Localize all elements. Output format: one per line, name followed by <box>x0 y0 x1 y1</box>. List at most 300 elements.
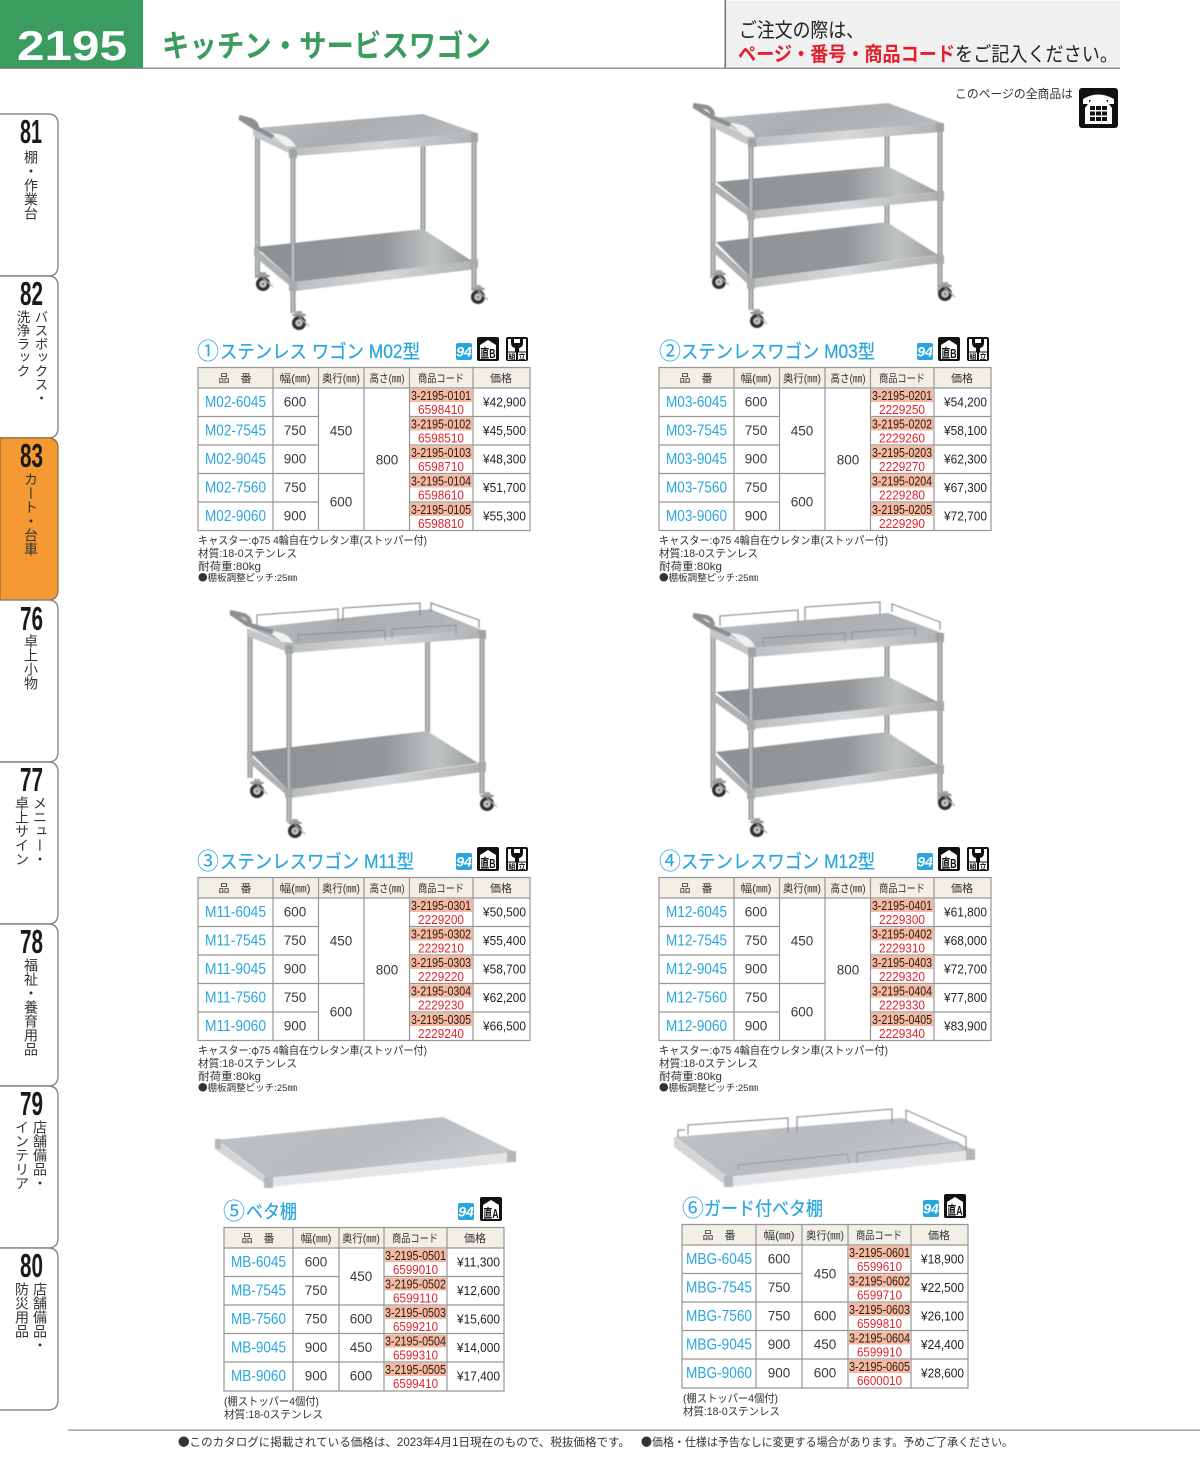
table: product 6: 6599910 <box>857 1346 902 1360</box>
table: product 1: 600 <box>330 494 352 510</box>
table: product 2: M03-6045 <box>666 394 727 411</box>
heading: product 1: ① <box>197 338 219 364</box>
badges: product 2: 組 <box>970 352 976 361</box>
table: product 1: 800 <box>376 452 398 468</box>
table: product 3: 3-2195-0302 <box>411 926 471 942</box>
heading: product 2: ② <box>659 338 681 364</box>
icon: telephone <box>1079 88 1118 128</box>
table: product 6: 3-2195-0605 <box>849 1359 910 1374</box>
table: product 3: 2229240 <box>418 1027 464 1041</box>
badges: product 2: 直B <box>942 346 956 361</box>
table: product 3: ¥58,700 <box>482 962 526 976</box>
badges: product 1: 組 <box>508 352 516 361</box>
table: product 2: M03-7545 <box>666 422 727 440</box>
table: product 1: ¥55,300 <box>482 508 526 524</box>
table: product 2: ¥62,300 <box>943 452 987 466</box>
table: product 4: 商品コード <box>879 882 925 895</box>
product image: flat shelf <box>215 1117 516 1188</box>
table: product 5: MB-9060 <box>231 1368 286 1385</box>
table: product 6: MBG-9060 <box>686 1365 752 1382</box>
sidebar tab 78 <box>0 923 58 1086</box>
table: product 1: 3-2195-0102 <box>411 416 471 432</box>
table: product 3: 奥行(㎜) <box>322 881 360 895</box>
table: product 5: 750 <box>305 1312 327 1326</box>
table: product 4: 600 <box>791 1004 813 1020</box>
table: product 1: M02-9045 <box>205 451 266 468</box>
table: product 4: 2229340 <box>879 1027 925 1041</box>
product image: cart M11 <box>230 603 497 838</box>
table: product 3: 600 <box>284 904 306 920</box>
table: product 6: 幅(㎜) <box>764 1229 794 1242</box>
table: product 4: ¥72,700 <box>943 962 987 976</box>
table: product 1: M02-7560 <box>205 480 266 496</box>
table: product 4: 750 <box>745 933 767 948</box>
product image: cart M12 <box>693 602 955 837</box>
table: product 3: M11-7545 <box>205 932 266 950</box>
table: product 6: 900 <box>768 1337 790 1352</box>
notes: product 4: 耐荷重:80kg <box>659 1069 722 1083</box>
table: product 6: 価格 <box>928 1228 950 1242</box>
table: product 6: 品 番 <box>702 1229 736 1242</box>
table: product 1: 奥行(㎜) <box>322 371 360 385</box>
table: product 4: M12-9045 <box>666 961 727 978</box>
notes: product 4: 材質:18-0ステンレス <box>659 1056 758 1070</box>
notes: product 1: 材質:18-0ステンレス <box>198 546 297 560</box>
table: product 5: 6599310 <box>393 1348 438 1362</box>
table: product 4: 2229300 <box>879 913 925 927</box>
table: product 1: 3-2195-0104 <box>411 474 471 488</box>
table: product 3: 2229230 <box>418 998 464 1012</box>
table: product 4: 800 <box>837 962 859 978</box>
table: product 4: ¥77,800 <box>943 990 987 1005</box>
table: product 1: 3-2195-0105 <box>411 502 471 517</box>
table: product 3: 3-2195-0303 <box>411 955 471 970</box>
table: product 4: M12-9060 <box>666 1018 727 1035</box>
table: product 1: M02-7545 <box>205 422 266 440</box>
table: product 3: M11-9060 <box>205 1018 266 1035</box>
badges: product 5 <box>458 1197 502 1221</box>
table: product 2: 2229270 <box>879 460 925 474</box>
table: product 3: 900 <box>284 1018 306 1034</box>
notes: product 3: キャスター:φ75 4輪自在ウレタン車(ストッパー付) <box>198 1042 427 1058</box>
heading: product 3: ③ <box>197 848 219 874</box>
footer note: ●価格・仕様は予告なしに変更する場合があります。予めご了承ください。 <box>641 1434 1013 1450</box>
badges: product 2: 立 <box>980 352 986 361</box>
footer note <box>178 1434 1013 1450</box>
notes: product 5: 材質:18-0ステンレス <box>224 1407 323 1421</box>
table: product 4: ¥68,000 <box>943 933 987 948</box>
badges: product 1 <box>456 337 528 361</box>
table: product 2: 2229250 <box>879 403 925 417</box>
table: product 6: 600 <box>814 1308 836 1324</box>
table: product 6: 3-2195-0601 <box>849 1245 910 1260</box>
sidebar tab 78: 福祉・養育用品 <box>23 958 39 1056</box>
table: product 5: MB-7545 <box>231 1282 286 1300</box>
notes: product 2: 材質:18-0ステンレス <box>659 546 758 560</box>
table: product 3: ¥66,500 <box>482 1018 526 1034</box>
table: product 2: ¥54,200 <box>943 394 987 410</box>
sidebar tab 80: 80 <box>20 1247 43 1284</box>
table: product 2: 750 <box>745 423 767 438</box>
table: product 1: 6598610 <box>418 488 464 502</box>
sidebar tab 83 active <box>0 437 58 600</box>
table: product 6: ¥22,500 <box>920 1280 964 1295</box>
table: product 4: 高さ(㎜) <box>830 881 866 895</box>
table: product 3: 900 <box>284 962 306 976</box>
badges: product 1: 直B <box>480 346 496 361</box>
table: product 2: 3-2195-0204 <box>872 474 932 488</box>
table: product 5: 3-2195-0504 <box>385 1334 446 1348</box>
table: product 3: M11-7560 <box>205 990 266 1006</box>
sidebar tab 76 <box>0 600 58 762</box>
sidebar tab 79: 店舗備品・ <box>32 1120 48 1190</box>
table: product 1: ¥42,900 <box>482 394 526 410</box>
heading: product 2: ステンレスワゴン M03型 <box>681 341 875 363</box>
table: product 5: 600 <box>305 1254 327 1270</box>
badges: product 3: 立 <box>518 862 526 871</box>
table: product 4: ¥83,900 <box>943 1018 987 1034</box>
notes: product 4: キャスター:φ75 4輪自在ウレタン車(ストッパー付) <box>659 1042 888 1058</box>
sidebar tab 79 <box>0 1085 58 1248</box>
table: product 1: 600 <box>284 394 306 410</box>
notes: product 6: 材質:18-0ステンレス <box>683 1404 780 1418</box>
table: product 6: 750 <box>768 1280 790 1295</box>
table: product 2: 3-2195-0201 <box>872 388 932 403</box>
table: product 3: ¥50,500 <box>482 904 526 920</box>
notes: product 5 <box>224 1394 323 1421</box>
table: product 4: 600 <box>745 904 767 920</box>
table: product 4: 450 <box>791 934 813 948</box>
table: product 2: 900 <box>745 452 767 466</box>
table: product 4: 3-2195-0403 <box>872 955 932 970</box>
table: product 2: 2229280 <box>879 488 925 502</box>
sidebar tab 77: 77 <box>20 761 43 798</box>
badges: product 1: 立 <box>518 352 526 361</box>
table: product 1: 450 <box>330 424 352 438</box>
heading: product 2 <box>659 338 875 364</box>
heading: product 1 <box>197 338 420 364</box>
table: product 1: 6598810 <box>418 517 464 531</box>
table: product 6: ¥24,400 <box>920 1337 964 1352</box>
badges: product 6: 直A <box>948 1203 963 1218</box>
table: product 4: 品 番 <box>680 882 712 895</box>
table: product 5: MB-7560 <box>231 1311 286 1328</box>
table: product 6: ¥28,600 <box>920 1366 964 1380</box>
table: product 6: 600 <box>768 1252 790 1266</box>
table: product 1: 6598510 <box>418 432 464 446</box>
table: product 6: 3-2195-0602 <box>849 1274 910 1288</box>
heading: product 1: ステンレス ワゴン M02型 <box>220 341 420 363</box>
table: product 1: 3-2195-0103 <box>411 445 471 460</box>
table: product 6: 600 <box>814 1366 836 1380</box>
table: product 2: 高さ(㎜) <box>830 371 866 385</box>
table: product 1: 3-2195-0101 <box>411 388 471 403</box>
sidebar tab 79: インテリア <box>14 1120 30 1190</box>
table: product 3: 2229220 <box>418 970 464 984</box>
footer note: ●このカタログに掲載されている価格は、2023年4月1日現在のもので、税抜価格です。 <box>178 1434 630 1450</box>
table: product 4: M12-6045 <box>666 904 727 921</box>
table: product 3: 2229200 <box>418 913 464 927</box>
badges: product 4 <box>917 847 989 871</box>
table: product 2: 750 <box>745 480 767 495</box>
table: product 4 <box>659 878 991 1041</box>
page number tab <box>0 0 143 69</box>
table: product 2: 2229260 <box>879 432 925 446</box>
sidebar tab 81 <box>0 113 58 276</box>
table: product 1: 750 <box>284 480 306 495</box>
table: product 1: ¥51,700 <box>482 480 526 495</box>
heading: product 3: ステンレスワゴン M11型 <box>220 851 414 873</box>
notes: product 6: (棚ストッパー4個付) <box>683 1391 778 1405</box>
table: product 3: ¥62,200 <box>482 990 526 1005</box>
table: product 1: 高さ(㎜) <box>370 371 404 385</box>
sidebar tab 82: バスボックス・ <box>32 310 48 404</box>
table: product 5: 900 <box>305 1340 327 1355</box>
sidebar tab 76: 卓上小物 <box>23 634 39 691</box>
phone note: このページの全商品は <box>955 87 1073 101</box>
table: product 3: 商品コード <box>418 882 464 895</box>
heading: product 4: ステンレスワゴン M12型 <box>681 851 875 873</box>
table: product 4: M12-7560 <box>666 990 727 1006</box>
table: product 6: 750 <box>768 1308 790 1324</box>
table: product 2: 600 <box>745 394 767 410</box>
table: product 5: 3-2195-0503 <box>385 1305 446 1320</box>
table: product 6: ¥18,900 <box>920 1252 964 1266</box>
table: product 5: MB-9045 <box>231 1340 286 1356</box>
table: product 1: M02-6045 <box>205 394 266 411</box>
table: product 6: 450 <box>814 1337 836 1352</box>
table: product 1: 750 <box>284 423 306 438</box>
table: product 3: 600 <box>330 1004 352 1020</box>
table: product 4: 3-2195-0402 <box>872 926 932 942</box>
table: product 3: 高さ(㎜) <box>370 881 404 895</box>
product image: guarded flat shelf <box>674 1109 975 1187</box>
table: product 6: 商品コード <box>856 1229 902 1242</box>
sidebar tab 76: 76 <box>20 600 43 637</box>
sidebar tab 82: 82 <box>20 275 43 312</box>
table: product 6: 6599810 <box>857 1317 902 1331</box>
sidebar tab 83 active: 83 <box>20 437 43 474</box>
table: product 2: 600 <box>791 494 813 510</box>
table: product 6: MBG-7560 <box>686 1308 752 1325</box>
table: product 4: ¥61,800 <box>943 904 987 920</box>
table: product 2: ¥67,300 <box>943 480 987 495</box>
table: product 2: 幅(㎜) <box>740 372 772 385</box>
notes: product 2 <box>659 532 888 584</box>
heading: product 4 <box>659 848 875 874</box>
table: product 6: 3-2195-0603 <box>849 1302 910 1317</box>
notes: product 4: ●棚板調整ピッチ:25㎜ <box>659 1080 758 1094</box>
table: product 1: 商品コード <box>418 372 464 385</box>
order notice: ページ・番号・商品コード <box>738 43 955 66</box>
sidebar tab 80: 店舗備品・ <box>32 1282 48 1352</box>
notes: product 1: ●棚板調整ピッチ:25㎜ <box>198 570 297 584</box>
sidebar tab 83 active: カート・台車 <box>23 472 39 556</box>
sidebar tab 82 <box>0 275 58 438</box>
table: product 5: ¥12,600 <box>456 1283 500 1298</box>
table: product 3 <box>198 878 530 1041</box>
table: product 5: ¥15,600 <box>456 1312 500 1326</box>
sidebar tab 77: 卓上サイン <box>14 796 30 866</box>
order notice: をご記入ください。 <box>955 43 1118 66</box>
table: product 5: 450 <box>350 1340 372 1355</box>
table: product 3: 2229210 <box>418 942 464 956</box>
sidebar tab 81: 棚・作業台 <box>23 150 39 220</box>
badges: product 4: 立 <box>980 862 986 871</box>
table: product 5: 3-2195-0502 <box>385 1276 446 1292</box>
table: product 5: 750 <box>305 1283 327 1298</box>
sidebar tab 77 <box>0 761 58 924</box>
badges: product 3: 直B <box>480 856 496 871</box>
badges: product 5: 直A <box>484 1206 499 1221</box>
table: product 4: 幅(㎜) <box>740 882 772 895</box>
table: product 5: 600 <box>350 1312 372 1326</box>
heading: product 5: ベタ棚 <box>246 1201 297 1223</box>
table: product 1: 価格 <box>490 371 512 385</box>
table: product 5: 3-2195-0501 <box>385 1248 446 1263</box>
table: product 3: 800 <box>376 962 398 978</box>
table: product 1: M02-9060 <box>205 508 266 525</box>
table: product 5: 3-2195-0505 <box>385 1362 446 1377</box>
badges: product 3 <box>456 847 528 871</box>
table: product 5: 奥行(㎜) <box>342 1231 380 1245</box>
table: product 3: ¥55,400 <box>482 933 526 948</box>
table: product 2: ¥58,100 <box>943 423 987 438</box>
order notice: ご注文の際は、 <box>739 19 864 42</box>
table: product 3: 3-2195-0304 <box>411 984 471 998</box>
table: product 6 <box>682 1224 968 1388</box>
notes: product 2: ●棚板調整ピッチ:25㎜ <box>659 570 758 584</box>
heading: product 3 <box>197 848 414 874</box>
badges: product 3: 94 <box>456 854 472 870</box>
table: product 2: 3-2195-0205 <box>872 502 932 517</box>
sidebar tab 78: 78 <box>20 923 43 960</box>
table: product 2 <box>659 368 991 531</box>
sidebar tab 81: 81 <box>20 113 42 150</box>
table: product 5: ¥14,000 <box>456 1340 500 1355</box>
table: product 1 <box>198 368 530 531</box>
table: product 5: 450 <box>350 1269 372 1284</box>
table: product 5: 600 <box>350 1368 372 1384</box>
table: product 6: 900 <box>768 1366 790 1380</box>
table: product 6: MBG-9045 <box>686 1336 752 1354</box>
badges: product 4: 94 <box>917 854 933 870</box>
table: product 2: 奥行(㎜) <box>783 371 821 385</box>
sidebar tab 77: メニュー・ <box>32 796 48 866</box>
table: product 5: 6599010 <box>393 1263 438 1277</box>
table: product 4: 3-2195-0405 <box>872 1012 932 1027</box>
table: product 5: 商品コード <box>392 1232 438 1245</box>
table: product 5: 幅(㎜) <box>300 1232 332 1245</box>
table: product 2: 2229290 <box>879 517 925 531</box>
notes: product 2: キャスター:φ75 4輪自在ウレタン車(ストッパー付) <box>659 532 888 548</box>
table: product 5: 品 番 <box>242 1232 274 1245</box>
heading: product 6: ⑥ <box>682 1195 704 1221</box>
table: product 5: 価格 <box>464 1231 486 1245</box>
notes: product 1 <box>198 532 427 584</box>
table: product 3: 750 <box>284 933 306 948</box>
table: product 1: 品 番 <box>218 372 252 385</box>
table: product 4: 2229330 <box>879 998 925 1012</box>
order notice <box>724 0 1120 68</box>
product image: cart M02 <box>239 114 488 330</box>
table: product 2: 3-2195-0202 <box>872 416 932 432</box>
table: product 2: 800 <box>837 452 859 468</box>
table: product 6: 450 <box>814 1266 836 1282</box>
table: product 4: 2229310 <box>879 942 925 956</box>
table: product 2: M03-9060 <box>666 508 727 525</box>
notes: product 3: 材質:18-0ステンレス <box>198 1056 297 1070</box>
table: product 2: 3-2195-0203 <box>872 445 932 460</box>
table: product 1: ¥48,300 <box>482 452 526 466</box>
table: product 6: 奥行(㎜) <box>806 1228 844 1242</box>
table: product 3: 価格 <box>490 881 512 895</box>
table: product 6: 3-2195-0604 <box>849 1330 910 1346</box>
table: product 6: 6599710 <box>857 1288 902 1302</box>
notes: product 3 <box>198 1042 427 1094</box>
notes: product 4 <box>659 1042 888 1094</box>
table: product 4: 900 <box>745 1018 767 1034</box>
sidebar tab 79: 79 <box>20 1085 43 1122</box>
table: product 1: 6598710 <box>418 460 464 474</box>
table: product 2: 900 <box>745 508 767 524</box>
badges: product 2: 94 <box>917 344 933 360</box>
badges: product 4: 直B <box>942 856 956 871</box>
sidebar tab 80: 防災用品 <box>14 1282 30 1338</box>
table: product 4: 奥行(㎜) <box>783 881 821 895</box>
table: product 6: ¥26,100 <box>920 1308 964 1324</box>
notes: product 3: 耐荷重:80kg <box>198 1069 261 1083</box>
table: product 2: M03-9045 <box>666 451 727 468</box>
table: product 3: 幅(㎜) <box>280 882 310 895</box>
page number tab: 2195 <box>17 22 127 69</box>
table: product 1: 900 <box>284 452 306 466</box>
table: product 6: MBG-6045 <box>686 1251 752 1268</box>
badges: product 1: 94 <box>456 344 472 360</box>
table: product 3: 品 番 <box>218 882 252 895</box>
table: product 5 <box>224 1228 504 1391</box>
table: product 3: 3-2195-0301 <box>411 898 471 913</box>
badges: product 5: 94 <box>458 1204 474 1220</box>
table: product 2: 品 番 <box>680 372 712 385</box>
heading: product 4: ④ <box>659 848 681 874</box>
table: product 5: 6599210 <box>393 1320 438 1334</box>
table: product 5: 6599110 <box>393 1292 438 1306</box>
table: product 4: 900 <box>745 962 767 976</box>
table: product 1: 6598410 <box>418 403 464 417</box>
sidebar tab 80 <box>0 1247 58 1410</box>
table: product 3: M11-9045 <box>205 961 266 978</box>
sidebar tab 82: 洗浄ラック <box>14 310 30 378</box>
badges: product 3: 組 <box>508 862 516 871</box>
table: product 2: ¥72,700 <box>943 508 987 524</box>
heading: product 6 <box>682 1195 823 1221</box>
table: product 1: 幅(㎜) <box>280 372 310 385</box>
table: product 4: 3-2195-0401 <box>872 898 932 913</box>
table: product 4: 2229320 <box>879 970 925 984</box>
table: product 2: 商品コード <box>879 372 925 385</box>
table: product 4: M12-7545 <box>666 932 727 950</box>
table: product 5: 900 <box>305 1368 327 1384</box>
table: product 6: 6600010 <box>857 1374 902 1388</box>
table: product 5: ¥11,300 <box>456 1254 500 1270</box>
heading: product 5: ⑤ <box>223 1198 245 1224</box>
table: product 2: 価格 <box>951 371 973 385</box>
heading: product 6: ガード付ベタ棚 <box>704 1198 823 1220</box>
notes: product 1: 耐荷重:80kg <box>198 559 261 573</box>
table: product 5: 6599410 <box>393 1377 438 1391</box>
table: product 2: 450 <box>791 424 813 438</box>
